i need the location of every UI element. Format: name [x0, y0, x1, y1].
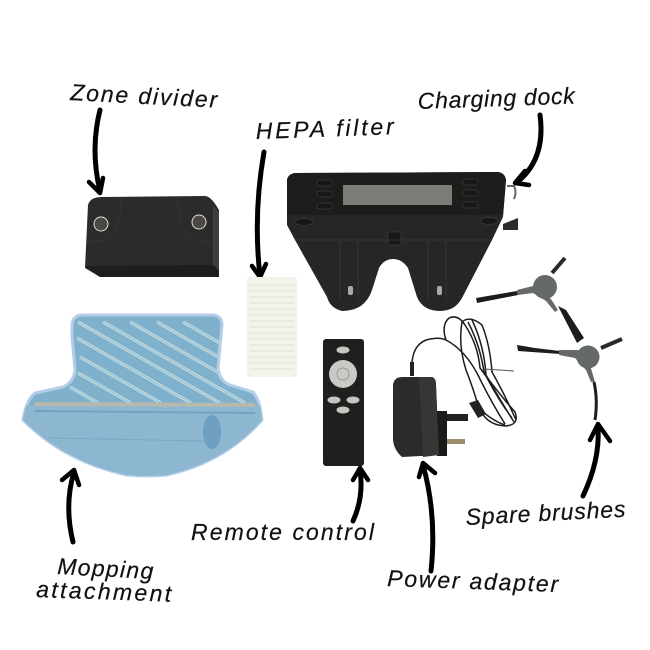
- label: Mopping attachment: Mopping: [57, 553, 154, 584]
- dock pins: [348, 286, 353, 295]
- label: Remote control: Remote control: [191, 519, 375, 545]
- label: Power adapter: Power adapter: [387, 565, 560, 597]
- arrow: Power adapter: [419, 463, 435, 571]
- spare brush: lower: [517, 339, 622, 420]
- arrow: Remote control: [353, 468, 368, 521]
- label: Charging dock: Charging dock: [417, 82, 577, 114]
- arrow: Zone divider: [89, 110, 103, 193]
- label: Spare brushes: Spare brushes: [465, 496, 627, 530]
- spare brush: upper: [476, 258, 584, 343]
- arrow: Spare brushes: [583, 424, 610, 496]
- charging dock product: [287, 172, 518, 311]
- power adapter product: [393, 317, 516, 457]
- zone divider product: [85, 196, 219, 277]
- HEPA filter product: [247, 277, 297, 377]
- arrow: HEPA filter: [252, 152, 266, 277]
- arrow: Mopping attachment: [62, 470, 79, 542]
- label: Zone divider: Zone divider: [69, 79, 219, 113]
- mopping attachment product: [21, 314, 264, 478]
- label: HEPA filter: HEPA filter: [255, 113, 395, 144]
- dock display: [343, 185, 452, 205]
- label: Mopping attachment: [36, 553, 173, 607]
- label: Mopping attachment: attachment: [36, 576, 173, 607]
- arrow: Charging dock: [515, 115, 541, 185]
- remote control product: [323, 339, 364, 466]
- dock buttons: [295, 179, 498, 245]
